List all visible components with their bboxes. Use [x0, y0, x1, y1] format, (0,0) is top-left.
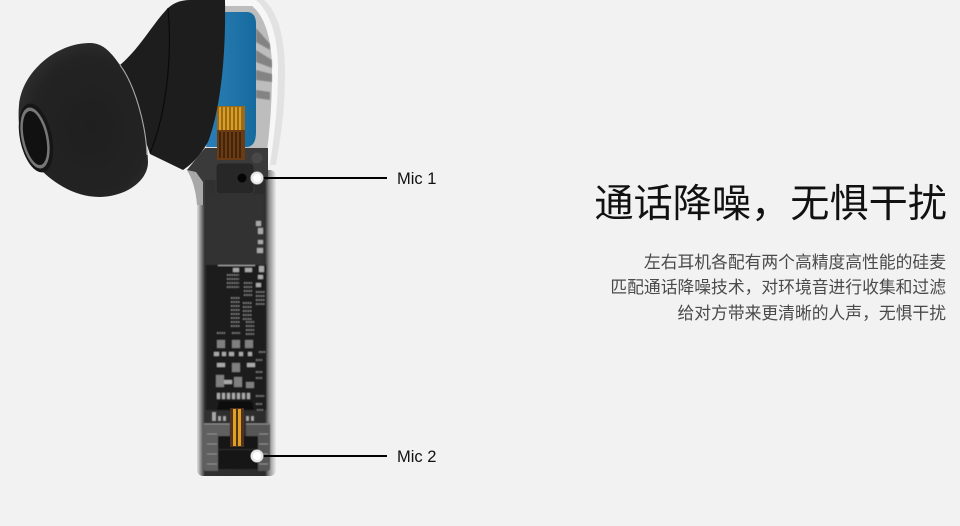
battery — [206, 12, 256, 147]
bottom flex cable — [230, 408, 244, 447]
title: 通话降噪，无惧干扰 — [594, 183, 947, 226]
description text: 匹配通话降噪技术，对环境音进行收集和过滤 — [610, 278, 946, 297]
circuit board — [206, 194, 266, 421]
label: Mic 2: Mic 2 — [397, 448, 436, 466]
earbud body — [120, 0, 225, 170]
flex cable — [217, 106, 245, 160]
description text — [610, 253, 946, 323]
stem base with mic 2 housing — [203, 423, 270, 471]
description text: 左右耳机各配有两个高精度高性能的硅麦 — [644, 253, 946, 272]
description text: 给对方带来更清晰的人声，无惧干扰 — [677, 304, 946, 323]
ear tip — [13, 43, 148, 197]
mic 1 marker and leader line — [250, 172, 387, 184]
earphone stem — [197, 170, 276, 476]
earphone shell — [200, 0, 285, 165]
label: Mic 1: Mic 1 — [397, 170, 436, 188]
microphone housing — [216, 163, 254, 194]
mic 2 marker and leader line — [250, 450, 387, 462]
